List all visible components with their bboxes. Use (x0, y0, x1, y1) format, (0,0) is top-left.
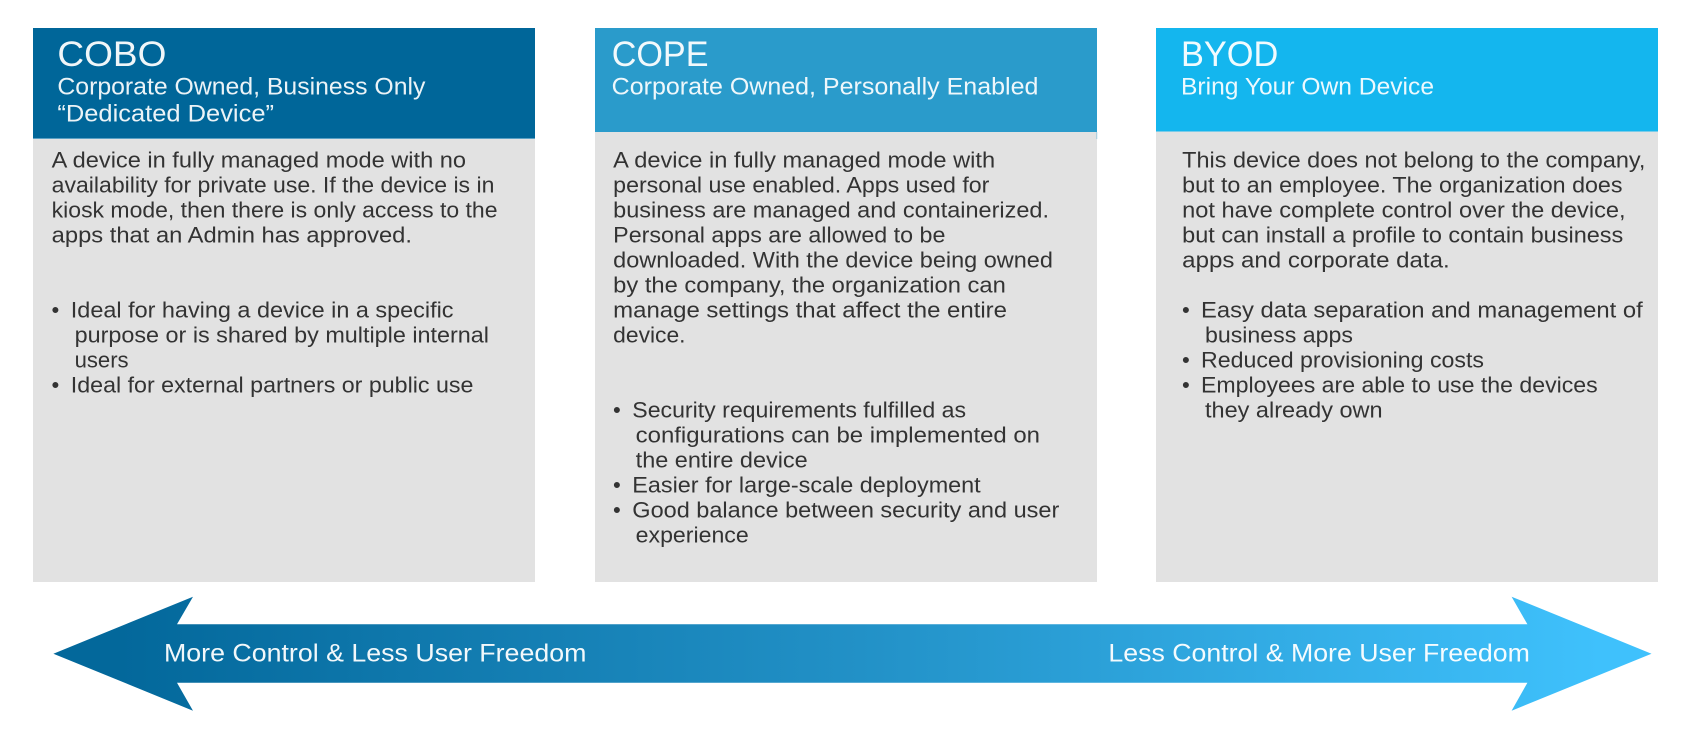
bullet list: BYOD: Easy data separation and management of (1201, 298, 1644, 323)
bullet list: COBO (52, 298, 489, 398)
bullet list: COPE: Easier for large-scale deployment (632, 473, 981, 498)
bullet list: COBO: Ideal for external partners or public use (71, 373, 473, 398)
double-headed control arrow (53, 597, 1651, 711)
description: BYOD: This device does not belong to the company, (1182, 148, 1645, 173)
description: COPE: personal use enabled. Apps used for (613, 173, 990, 198)
description: COBO: availability for private use. If the device is in (52, 173, 494, 198)
description: COPE (613, 148, 1053, 348)
arrow label: left: More Control & Less User Freedom (164, 640, 586, 668)
bullet list: COBO: Ideal for having a device in a specific (71, 298, 454, 323)
header band: COPE: Corporate Owned, Personally Enabled (612, 73, 1038, 100)
panel: COPE (595, 28, 1097, 582)
description: COPE: device. (613, 323, 686, 348)
bullet list: COBO: purpose or is shared by multiple internal (75, 323, 489, 348)
description: COPE: Personal apps are allowed to be (613, 223, 945, 248)
bullet list: COPE: • (613, 498, 621, 523)
description: COBO: apps that an Admin has approved. (52, 223, 412, 248)
bullet list: COBO: • (52, 373, 59, 398)
description: COPE: A device in fully managed mode with (613, 148, 995, 173)
bullet list: BYOD: • (1182, 348, 1190, 373)
panel: BYOD (1156, 28, 1658, 582)
description: COBO: kiosk mode, then there is only access to the (52, 198, 497, 223)
panel: COBO (33, 28, 535, 582)
description: BYOD (1182, 148, 1645, 273)
bullet list: BYOD (1182, 298, 1644, 423)
header band: COPE: COPE (612, 35, 708, 74)
description: COPE: downloaded. With the device being owned (613, 248, 1053, 273)
description: COPE: manage settings that affect the entire (613, 298, 1007, 323)
bullet list: COBO: users (75, 348, 129, 373)
bullet list: COPE: Good balance between security and user (632, 498, 1060, 523)
bullet list: COPE: • (613, 398, 621, 423)
bullet list: BYOD: Reduced provisioning costs (1201, 348, 1484, 373)
bullet list: BYOD: business apps (1205, 323, 1353, 348)
header band: COPE (595, 28, 1097, 139)
bullet list: BYOD: they already own (1205, 398, 1383, 423)
header band: COBO: Corporate Owned, Business Only (57, 73, 425, 100)
description: BYOD: apps and corporate data. (1182, 248, 1450, 273)
description: COBO (52, 148, 497, 248)
description: COBO: A device in fully managed mode with no (52, 148, 466, 173)
arrow label: right: Less Control & More User Freedom (1108, 640, 1530, 668)
bullet list: COPE: configurations can be implemented on (636, 423, 1040, 448)
bullet list: COBO: • (52, 298, 59, 323)
description: BYOD: but can install a profile to contain business (1182, 223, 1623, 248)
description: BYOD: not have complete control over the device, (1182, 198, 1626, 223)
bullet list: COPE: experience (636, 523, 749, 548)
header band: BYOD: Bring Your Own Device (1181, 73, 1434, 100)
header band: COBO: “Dedicated Device” (57, 101, 274, 128)
header band: BYOD: BYOD (1181, 35, 1278, 74)
bullet list: BYOD: Employees are able to use the devices (1201, 373, 1598, 398)
bullet list: COPE (613, 398, 1060, 548)
bullet list: COPE: Security requirements fulfilled as (632, 398, 966, 423)
header band: COBO (33, 28, 535, 139)
bullet list: BYOD: • (1182, 298, 1190, 323)
description: COPE: by the company, the organization can (613, 273, 1006, 298)
bullet list: COPE: the entire device (636, 448, 808, 473)
description: BYOD: but to an employee. The organization does (1182, 173, 1622, 198)
description: COPE: business are managed and containerized. (613, 198, 1049, 223)
header band: BYOD (1156, 28, 1658, 132)
bullet list: COPE: • (613, 473, 621, 498)
header band: COBO: COBO (57, 35, 166, 74)
bullet list: BYOD: • (1182, 373, 1190, 398)
